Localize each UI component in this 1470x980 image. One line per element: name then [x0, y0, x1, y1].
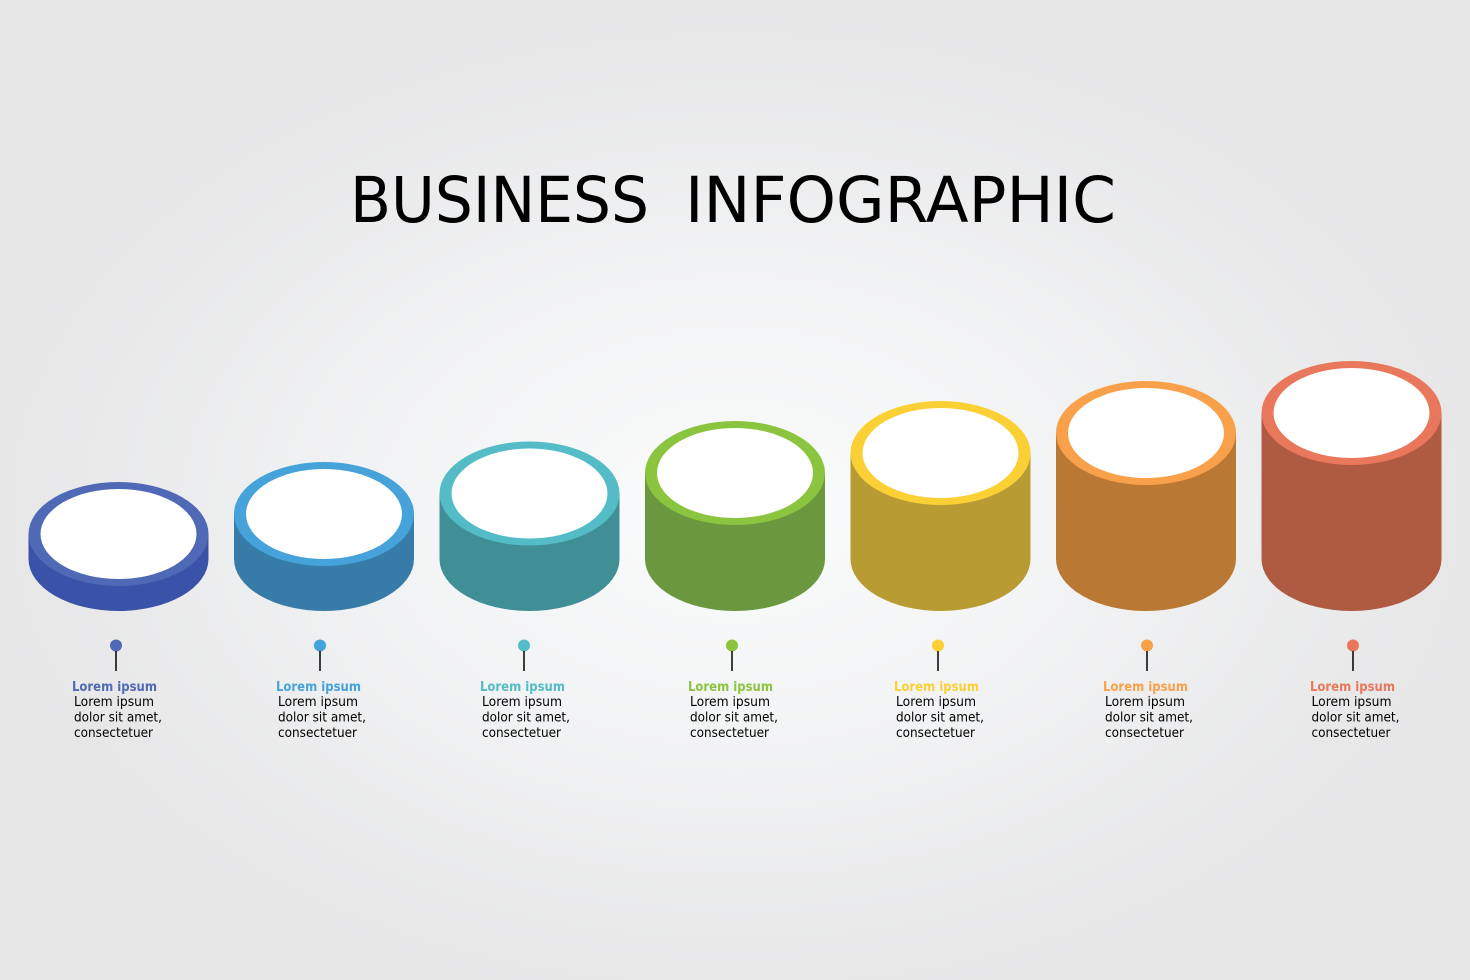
- label 4: Lorem ipsum: [688, 680, 773, 695]
- label 5: [894, 640, 984, 741]
- label 5: dolor sit amet,: [896, 710, 984, 726]
- cylinder 5: yellow: [850, 401, 1030, 611]
- label 7: consectetuer: [1312, 726, 1391, 741]
- cylinder 4: green: [645, 421, 825, 611]
- label 1: dolor sit amet,: [74, 710, 162, 726]
- label 1: Lorem ipsum: [74, 695, 154, 710]
- label 5: consectetuer: [896, 726, 976, 741]
- label 1: [72, 640, 162, 741]
- label 3: consectetuer: [482, 726, 562, 741]
- cylinder 1: blue, shortest: [28, 482, 208, 611]
- label 3: Lorem ipsum: [480, 680, 565, 695]
- label 2: consectetuer: [278, 726, 358, 741]
- label 1: Lorem ipsum: [72, 680, 157, 695]
- cylinder 6: orange: [1056, 381, 1236, 611]
- label 6: consectetuer: [1105, 726, 1185, 741]
- label 7: [1310, 640, 1400, 741]
- label 6: Lorem ipsum: [1105, 695, 1185, 710]
- label 3: Lorem ipsum: [482, 695, 562, 710]
- cylinder 7: red-orange, tallest: [1262, 361, 1442, 611]
- title: INFOGRAPHIC: [685, 164, 1116, 237]
- title: [350, 164, 1116, 237]
- label 2: Lorem ipsum: [278, 695, 358, 710]
- label 7: Lorem ipsum: [1312, 695, 1392, 710]
- label 7: dolor sit amet,: [1312, 710, 1400, 726]
- label 2: dolor sit amet,: [278, 710, 366, 726]
- label 1: consectetuer: [74, 726, 154, 741]
- label 6: dolor sit amet,: [1105, 710, 1193, 726]
- label 7: Lorem ipsum: [1310, 680, 1395, 695]
- cylinder 2: sky blue: [234, 462, 414, 611]
- label 6: Lorem ipsum: [1103, 680, 1188, 695]
- label 5: Lorem ipsum: [896, 695, 976, 710]
- label 5: Lorem ipsum: [894, 680, 979, 695]
- label 6: [1103, 640, 1193, 741]
- cylinder 3: teal: [440, 442, 620, 611]
- label 2: Lorem ipsum: [276, 680, 361, 695]
- label 3: dolor sit amet,: [482, 710, 570, 726]
- label 2: [276, 640, 366, 741]
- label 3: [480, 640, 570, 741]
- label 4: [688, 640, 778, 741]
- label 4: dolor sit amet,: [690, 710, 778, 726]
- label 4: consectetuer: [690, 726, 770, 741]
- label 4: Lorem ipsum: [690, 695, 770, 710]
- title: BUSINESS: [350, 164, 649, 237]
